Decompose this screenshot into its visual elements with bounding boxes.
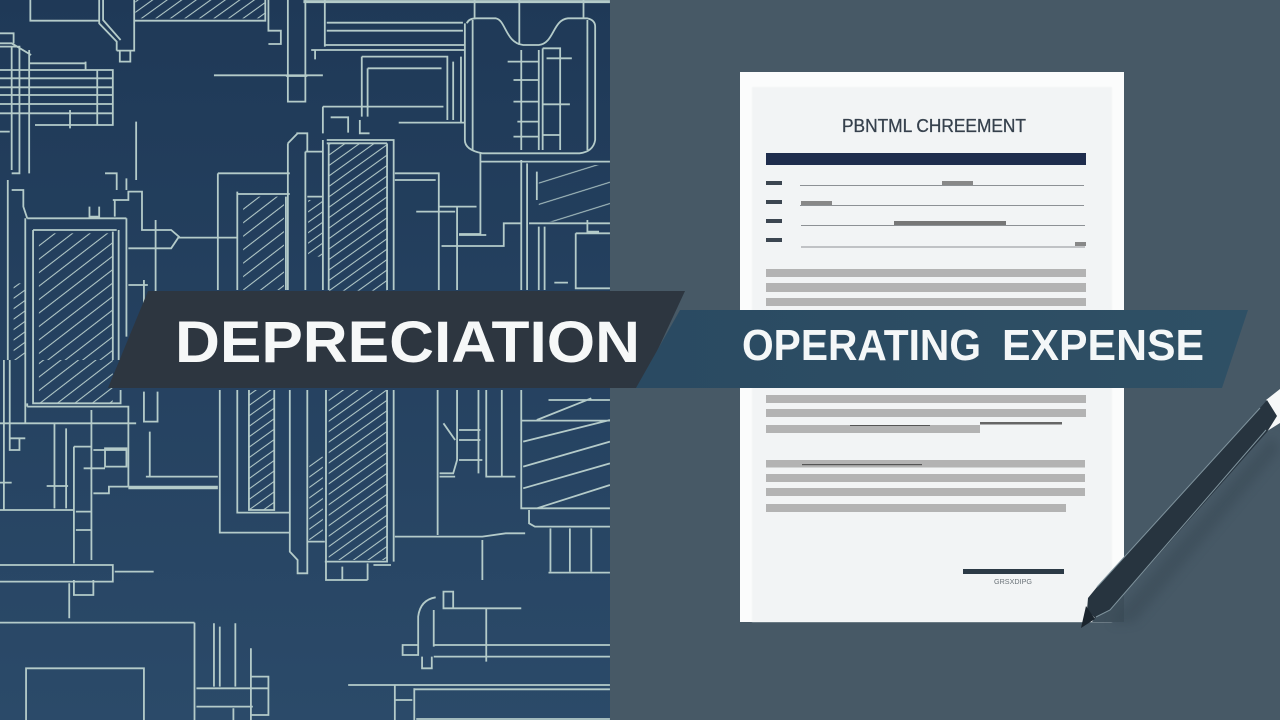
document: rental agreement sheet <box>740 72 1124 622</box>
banner: operating expense <box>636 310 1248 388</box>
panel: blueprint background <box>0 0 610 720</box>
text lines block three <box>766 460 1085 512</box>
document title: PBNTML CHREEMENT <box>842 115 1026 136</box>
panel: slate background <box>610 0 1280 720</box>
form fields <box>766 181 1086 248</box>
banner label: operating expense: OPERATING <box>742 321 981 370</box>
banner label: operating expense: EXPENSE <box>1002 321 1204 370</box>
blueprint drawing: lower half <box>0 360 610 720</box>
banner: depreciation <box>108 291 685 388</box>
text lines block one <box>766 269 1086 306</box>
banner label: operating expense <box>742 321 1204 370</box>
signature line: GRSXDIPG <box>994 579 1032 586</box>
document header bar <box>766 153 1086 165</box>
blueprint drawing: upper half <box>0 0 610 360</box>
signature line <box>963 569 1064 586</box>
text lines block two <box>766 395 1086 433</box>
icon: pen <box>1081 389 1280 628</box>
banner label: depreciation: DEPRECIATION <box>175 310 640 375</box>
